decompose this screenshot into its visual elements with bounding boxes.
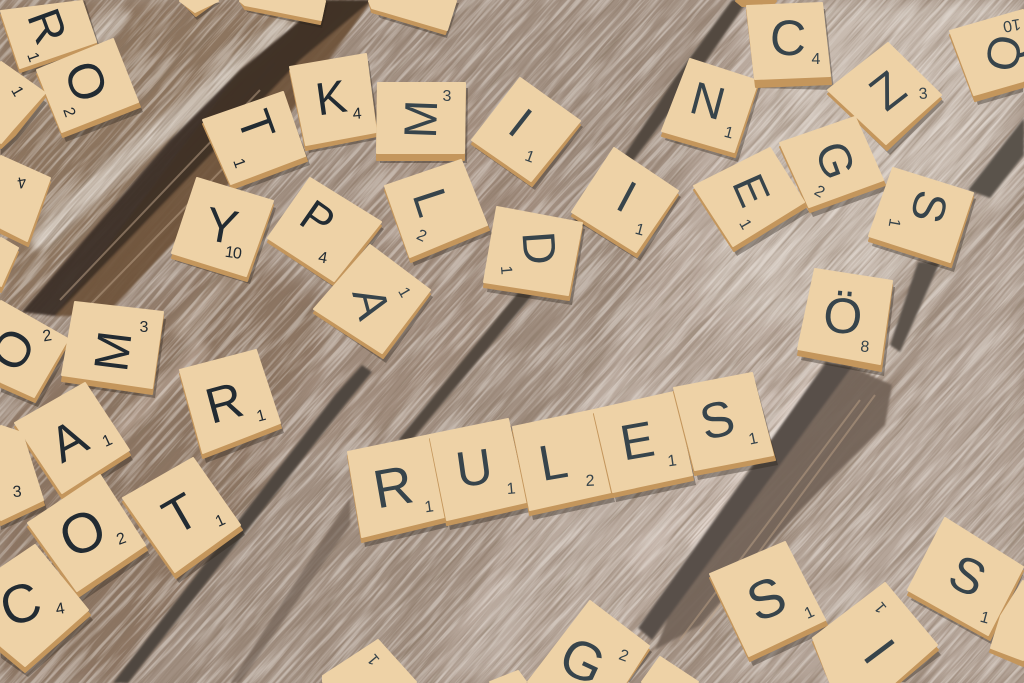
tile: A (314, 245, 433, 363)
tile: I upper: 1 (522, 148, 537, 167)
tile: P: 4 (317, 249, 329, 267)
tile: A: 1 (394, 285, 414, 301)
tile: E: E (616, 411, 658, 471)
tile: M left: M (85, 328, 143, 374)
tile: U (430, 419, 530, 530)
tile: 3 left (1, 426, 47, 530)
tile: R (348, 435, 448, 547)
tile: S far right: 1 (978, 609, 991, 628)
tile: G bottom (528, 601, 652, 683)
tile: C: 4 (812, 51, 821, 68)
tile: Z (828, 43, 944, 155)
tile: O left: 2 (41, 327, 53, 345)
tile: top fragment middle (240, 1, 328, 28)
tile: O left (0, 301, 71, 407)
tile: 3 left: 3 (12, 483, 22, 501)
tile: T: 1 (229, 156, 248, 171)
tile: far right fragment (990, 581, 1023, 666)
tile: O: 2 (59, 105, 78, 120)
tile: I lower: 1 (633, 221, 646, 240)
tile: S far right: S (941, 543, 995, 608)
tile: L (513, 410, 615, 520)
tile: left edge 4: 4 (16, 173, 28, 191)
tile: L bottom: 1 (365, 650, 383, 668)
tile: S lower: 1 (802, 604, 817, 623)
tile: left edge 1 (1, 62, 47, 155)
tile: Y: Y (201, 198, 242, 256)
tile: S (674, 373, 778, 480)
tile: K: 4 (352, 105, 362, 123)
tile: P: P (291, 191, 343, 248)
tile: G (780, 117, 888, 217)
tile: O lower left (28, 475, 150, 602)
tile: Z: Z (860, 61, 916, 121)
tile: Ö (798, 269, 895, 376)
tile: C: C (769, 9, 807, 67)
tile: Y: 10 (224, 244, 243, 263)
tile: I lower right: I (853, 629, 906, 674)
tile: I lower: I (609, 171, 645, 222)
tile: O lower left: O (49, 495, 115, 570)
tile: L: L (535, 432, 572, 492)
tile: N (662, 59, 761, 162)
tile: K (290, 54, 380, 153)
tile: D: 1 (497, 265, 515, 275)
tile: I lower right: 1 (872, 598, 890, 616)
tile: C lower left (0, 545, 93, 677)
tile: Q (950, 10, 1024, 105)
tile: O lower left: 2 (114, 530, 129, 549)
tile: left edge fragment (1, 238, 18, 292)
tile: S far right (908, 518, 1023, 645)
tile: M left (62, 302, 166, 398)
tile: left edge 1: 1 (7, 84, 27, 100)
tile: top fragment left (180, 0, 220, 20)
tile: G: 2 (811, 183, 828, 202)
tile: R top left: R (17, 2, 78, 51)
tile: S lower (710, 542, 830, 666)
word: RULES (348, 373, 778, 547)
tile: Ö: 8 (860, 338, 870, 356)
tile: S: 1 (747, 430, 759, 448)
tile: T left: T (153, 482, 208, 546)
tile: R middle: 1 (255, 407, 268, 426)
tile: O (37, 39, 143, 142)
tile: R middle: R (200, 371, 249, 435)
tile: I upper (472, 78, 583, 190)
tile: L: L (403, 182, 460, 222)
tile: left edge 4 (1, 156, 50, 246)
tile: R top left: 1 (23, 50, 42, 65)
tile: I lower (572, 148, 681, 261)
tile: E: E (722, 167, 779, 214)
tile: A left (15, 383, 133, 503)
tile: S right (869, 168, 976, 272)
tile: R top left (1, 1, 100, 76)
tile: I lower right (813, 583, 941, 682)
tile: U: 1 (506, 480, 516, 498)
tile: R middle (180, 350, 284, 463)
tile: S right: S (900, 185, 959, 228)
tile: T: T (227, 103, 286, 147)
tile: A left: 1 (100, 432, 115, 451)
tile: T (203, 92, 310, 193)
tile: S lower: S (739, 565, 794, 634)
tile: A: A (342, 282, 401, 325)
tile: O: O (53, 53, 119, 109)
tile: T left: 1 (213, 512, 228, 531)
tile: bottom fragment (490, 671, 526, 682)
tile: M top: M (394, 99, 447, 139)
tile: E: 1 (667, 452, 678, 470)
tile: M left: 3 (140, 319, 149, 336)
tile: D (484, 207, 585, 305)
tile: T left (123, 458, 245, 583)
tile: top fragment right (369, 1, 459, 38)
tile: Q: 10 (1001, 15, 1022, 35)
tile: L: 2 (414, 227, 429, 246)
tile: N: 1 (722, 124, 735, 143)
tile: A left: A (41, 408, 97, 473)
tile: R: R (369, 454, 418, 520)
tile: Y (172, 178, 276, 284)
tile: fragment near C (736, 1, 776, 6)
tile: N: N (685, 71, 731, 130)
tile: Ö: Ö (821, 286, 865, 346)
tile: bottom fragment right (642, 657, 698, 682)
tile: C (747, 3, 834, 90)
tile: L: 2 (585, 473, 595, 490)
tile: L (385, 160, 492, 266)
tile: K: K (312, 70, 350, 125)
tile: S right: 1 (885, 217, 903, 229)
tile: R: 1 (424, 498, 435, 516)
tile: E (694, 148, 809, 256)
tile: G bottom: 2 (616, 647, 631, 666)
tile: S: S (694, 389, 740, 451)
tile: D: D (512, 230, 567, 266)
tile: M top (377, 83, 468, 163)
tile: M top: 3 (443, 88, 452, 105)
tile: Z: 3 (918, 85, 928, 103)
tile: E: 1 (735, 217, 755, 233)
tile: U: U (452, 438, 496, 498)
tile: G: G (805, 134, 866, 186)
tile: I upper: I (500, 98, 542, 147)
tile: L bottom (323, 640, 416, 682)
tile: C lower left: 4 (54, 600, 66, 618)
tile: P (268, 178, 384, 290)
tile: E (594, 392, 696, 502)
